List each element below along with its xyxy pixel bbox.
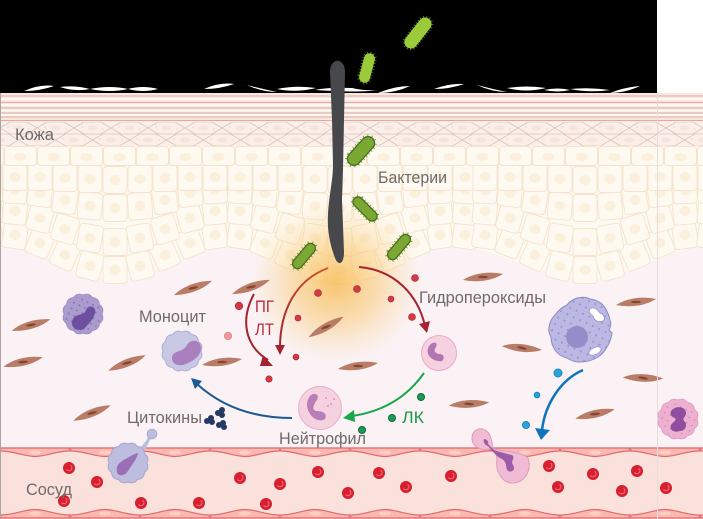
label: hydroperoxides: Гидропероксиды xyxy=(419,288,546,307)
macrophage xyxy=(549,297,612,362)
faint panel edge xyxy=(656,93,658,519)
purple granulocyte xyxy=(63,294,103,334)
green dots xyxy=(358,394,424,434)
arrow: red to centre xyxy=(275,268,328,355)
vessel lower wall xyxy=(1,510,703,518)
monocyte xyxy=(162,331,202,371)
bacteria outside skin xyxy=(358,15,434,84)
blue dots xyxy=(522,369,562,428)
neutrophil upper xyxy=(422,336,456,370)
phagosome lower xyxy=(588,345,602,357)
transmigrating neutrophil xyxy=(472,429,529,483)
arrow: navy to monocyte xyxy=(191,378,292,418)
vessel upper wall xyxy=(1,448,703,456)
label: monocyte: Моноцит xyxy=(139,307,206,326)
stratum corneum layers xyxy=(0,93,703,123)
neutrophil lower xyxy=(298,386,342,430)
label: vessel: Сосуд xyxy=(26,480,72,499)
black air region above skin xyxy=(0,0,657,93)
label: bacteria: Бактерии xyxy=(378,168,447,187)
epidermis cell layer xyxy=(0,146,703,284)
cytokine clusters xyxy=(204,407,227,430)
label: neutrophil: Нейтрофил xyxy=(279,429,366,448)
transmigrating monocyte xyxy=(108,429,157,483)
segmented nucleus xyxy=(484,439,514,472)
fibroblasts xyxy=(3,273,663,422)
arrow: green xyxy=(343,373,424,422)
skin surface flakes xyxy=(24,84,640,93)
red blood cells xyxy=(58,460,672,510)
dermis background xyxy=(0,146,703,451)
blood vessel xyxy=(0,447,703,519)
label: skin: Кожа xyxy=(15,125,55,144)
label: prostaglandins: ПГ xyxy=(255,297,274,316)
label: leukotrienes: ЛТ xyxy=(255,320,274,339)
phagosome upper xyxy=(589,308,604,322)
hair xyxy=(328,61,345,263)
granular layer diamond cells xyxy=(0,122,703,146)
arrow: to neutrophil xyxy=(359,267,430,333)
inflammation glow xyxy=(248,200,424,364)
arrow: blue to vessel xyxy=(535,370,583,440)
bacteria inside skin xyxy=(291,134,412,271)
left image edge xyxy=(0,93,2,519)
label: LC: ЛК xyxy=(402,408,424,427)
label: cytokines: Цитокины xyxy=(127,408,202,427)
red dots: prostaglandins and leukotrienes xyxy=(224,274,418,382)
arrow: ПГ ЛТ curve xyxy=(246,294,273,366)
pink granulocyte right xyxy=(658,399,698,439)
